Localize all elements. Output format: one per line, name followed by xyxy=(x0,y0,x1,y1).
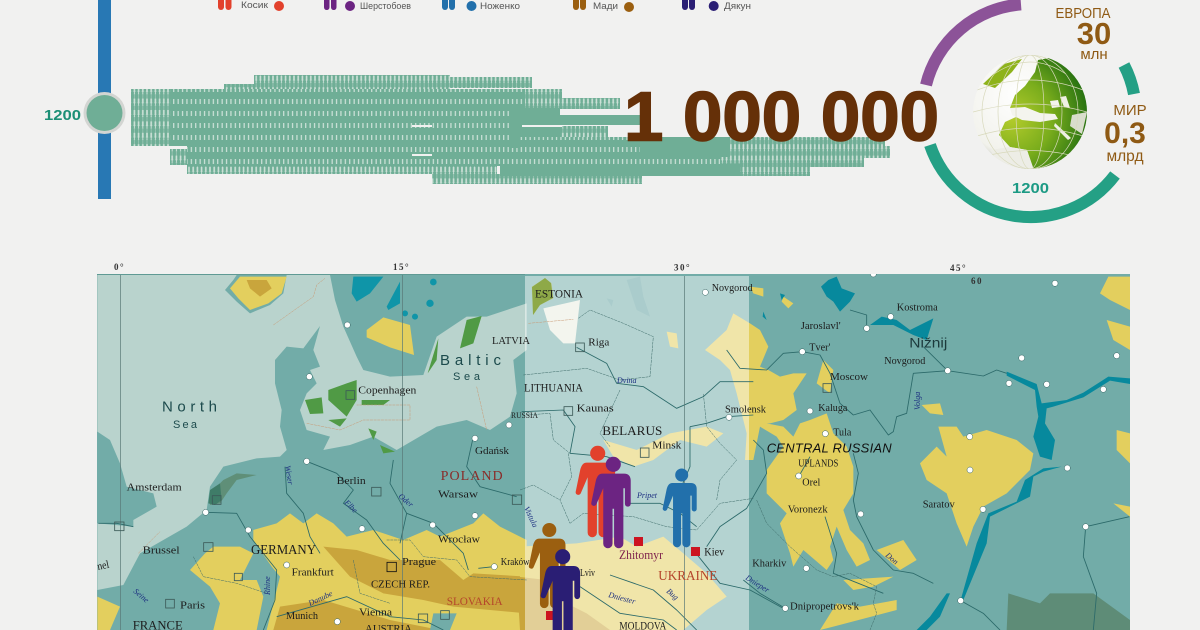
legend item: Sherstoboev xyxy=(324,0,411,11)
map labels: central and eastern names: Kaunas xyxy=(577,403,614,415)
big number: 1 000 000: 1 000 000 xyxy=(624,78,939,156)
legend item: Kosik xyxy=(218,0,284,11)
map labels: western cities and countries: Paris xyxy=(180,599,205,611)
map labels: central and eastern names: ESTONIA xyxy=(535,287,583,301)
figure: Nozhenko blue xyxy=(663,469,697,547)
map labels: river names: Dvina xyxy=(616,376,637,385)
map labels: central and eastern names: Saratov xyxy=(923,498,955,510)
timeline marker 1200 xyxy=(84,92,126,134)
label: ring year 1200: 1200 xyxy=(1012,181,1049,197)
legend item: Nozhenko xyxy=(442,0,520,11)
map label: sea names: Sea xyxy=(453,371,481,383)
map labels: central and eastern names: Moscow xyxy=(830,371,868,383)
map labels: central and eastern names: Smolensk xyxy=(725,404,766,416)
map east terrain xyxy=(705,277,1130,630)
map cities: white dots xyxy=(203,271,1120,625)
label: Europe 30 mln xyxy=(1056,5,1111,63)
map label: sea names xyxy=(162,352,502,431)
map labels: western cities and countries: nel xyxy=(96,559,110,573)
map labels: red country names xyxy=(441,469,717,608)
map labels: central and eastern names: Kaluga xyxy=(818,402,847,414)
map labels: western cities and countries: Brussel xyxy=(143,544,180,556)
map labels: western cities and countries xyxy=(96,335,538,630)
map labels: red country names: UKRAINE xyxy=(658,569,717,584)
map labels: river names: Oder xyxy=(397,492,416,510)
map labels: river names: Dnieper xyxy=(743,573,772,595)
figure: Dyakun navy xyxy=(541,549,580,630)
map labels: central and eastern names: Kostroma xyxy=(897,302,938,314)
map capitals: squares xyxy=(115,343,832,623)
timeline bar xyxy=(98,0,111,199)
ring arc: world upper xyxy=(1124,65,1134,94)
map labels: river names: Vistula xyxy=(522,505,540,529)
map green islands in band xyxy=(532,278,553,315)
label: World 0.3 bln: млрд xyxy=(1106,148,1144,165)
longitude labels: 45° xyxy=(950,263,967,273)
legend item: Madi: Мади xyxy=(593,1,618,11)
map labels: western cities and countries: Amsterdam xyxy=(127,482,182,494)
map labels: red country names: POLAND xyxy=(441,469,504,484)
map labels: western cities and countries: Frankfurt xyxy=(292,567,334,579)
label: World 0.3 bln: МИР xyxy=(1113,102,1147,119)
map label: Nizhnij: Nižnij xyxy=(909,334,947,350)
map labels: central and eastern names: Kharkiv xyxy=(752,558,787,570)
legend item: Kosik: Косик xyxy=(241,0,268,10)
map labels: western cities and countries: Kraków xyxy=(501,556,530,568)
map labels: central and eastern names: Minsk xyxy=(652,439,682,451)
map labels: central and eastern names: Novgorod xyxy=(712,282,753,294)
map central terrain xyxy=(517,277,727,630)
map west terrain xyxy=(97,275,527,630)
map labels: river names: Rhine xyxy=(263,576,272,596)
map labels: river names: Don xyxy=(883,550,900,566)
map labels: western cities and countries: CZECH REP. xyxy=(371,579,430,591)
map label: sea names: Sea xyxy=(173,419,198,431)
longitude labels: 60 xyxy=(971,276,983,286)
map labels: central and eastern names: BELARUS xyxy=(602,423,662,438)
longitude labels xyxy=(114,262,983,286)
label: Europe 30 mln: ЕВРОПА xyxy=(1056,5,1110,22)
legend item: Dyakun xyxy=(682,0,751,11)
map labels: river names: Seine xyxy=(132,587,151,605)
ring arc: 1200 lower xyxy=(930,145,1115,217)
icon: green globe xyxy=(973,55,1092,172)
longitude labels: 15° xyxy=(393,262,410,272)
map labels: river names xyxy=(132,376,922,608)
map labels: central and eastern names: Novgorod xyxy=(884,355,926,367)
map labels: central and eastern names: Jaroslavl' xyxy=(801,320,841,332)
longitude labels: 30° xyxy=(674,262,691,272)
map labels: western cities and countries: Vienna xyxy=(359,607,392,619)
map labels: central and eastern names: Orel xyxy=(802,477,820,489)
map central band overlay xyxy=(525,276,749,630)
longitude labels: 0° xyxy=(114,262,125,272)
map labels: central and eastern names: Kiev xyxy=(704,545,724,559)
map labels: western cities and countries: Warsaw xyxy=(438,489,478,501)
map labels: central and eastern names: UPLANDS xyxy=(798,458,838,470)
label: World 0.3 bln xyxy=(1104,102,1147,165)
map labels: central and eastern names: LITHUANIA xyxy=(524,381,583,395)
map label: Central Russian: CENTRAL RUSSIAN xyxy=(767,440,892,455)
figure: Madi brown xyxy=(529,523,566,608)
map of Europe xyxy=(96,271,1130,630)
map labels: river names: Volga xyxy=(913,392,922,410)
figure: Sherstoboev purple xyxy=(591,457,631,548)
meridians xyxy=(120,274,684,630)
crowd of one million people xyxy=(131,75,890,184)
map labels: central and eastern names: Lviv xyxy=(580,567,595,579)
map labels: western cities and countries: Wrocław xyxy=(438,534,480,546)
map labels: river names: Pripet xyxy=(636,491,658,500)
map labels: river names: Dniester xyxy=(607,590,637,606)
label: World 0.3 bln: 0,3 xyxy=(1104,117,1146,150)
map labels: river names: Bug xyxy=(665,587,680,602)
map top edge xyxy=(97,274,525,275)
legend item: Sherstoboev: Шерстобоев xyxy=(360,1,411,11)
map labels: central and eastern names: Tula xyxy=(833,427,851,439)
legend item: Nozhenko: Ноженко xyxy=(480,1,520,11)
legend: researchers xyxy=(218,0,751,12)
map labels: western cities and countries: Copenhagen xyxy=(358,384,417,396)
map labels: western cities and countries: Munich xyxy=(286,610,318,622)
label: Europe 30 mln: млн xyxy=(1080,46,1108,63)
map labels: red country names: Zhitomyr xyxy=(619,547,664,562)
ring arc: Europe share xyxy=(926,4,1021,85)
legend item: Madi xyxy=(573,0,634,12)
timeline year label: 1200 xyxy=(44,108,81,124)
map labels: central and eastern names: Dnipropetrovs'k xyxy=(790,600,859,612)
map label: sea names: Baltic xyxy=(440,352,502,369)
figure: Kosik red xyxy=(576,446,615,537)
red markers: sites xyxy=(546,537,700,620)
legend item: Dyakun: Дякун xyxy=(724,1,751,11)
map labels: western cities and countries: LATVIA xyxy=(492,335,530,347)
label: Europe 30 mln: 30 xyxy=(1077,16,1111,51)
map labels: central and eastern names: Voronezk xyxy=(788,503,828,515)
map labels: central and eastern names: Tver' xyxy=(809,342,830,354)
map labels: western cities and countries: Prague xyxy=(402,556,436,568)
map labels: central and eastern names xyxy=(524,282,955,630)
map labels: river names: Weser xyxy=(283,465,295,486)
map labels: river names: Danube xyxy=(306,589,334,608)
map labels: central and eastern names: Riga xyxy=(588,337,609,349)
map labels: western cities and countries: Gdańsk xyxy=(475,445,510,457)
map labels: river names: Elbe xyxy=(342,497,360,515)
map labels: western cities and countries: GERMANY xyxy=(251,543,316,558)
map label: sea names: North xyxy=(162,398,217,416)
map labels: western cities and countries: Berlin xyxy=(337,475,366,487)
map labels: western cities and countries: RUSSIA xyxy=(511,411,538,420)
map rivers and borders xyxy=(98,274,1129,630)
map labels: red country names: SLOVAKIA xyxy=(447,594,503,608)
